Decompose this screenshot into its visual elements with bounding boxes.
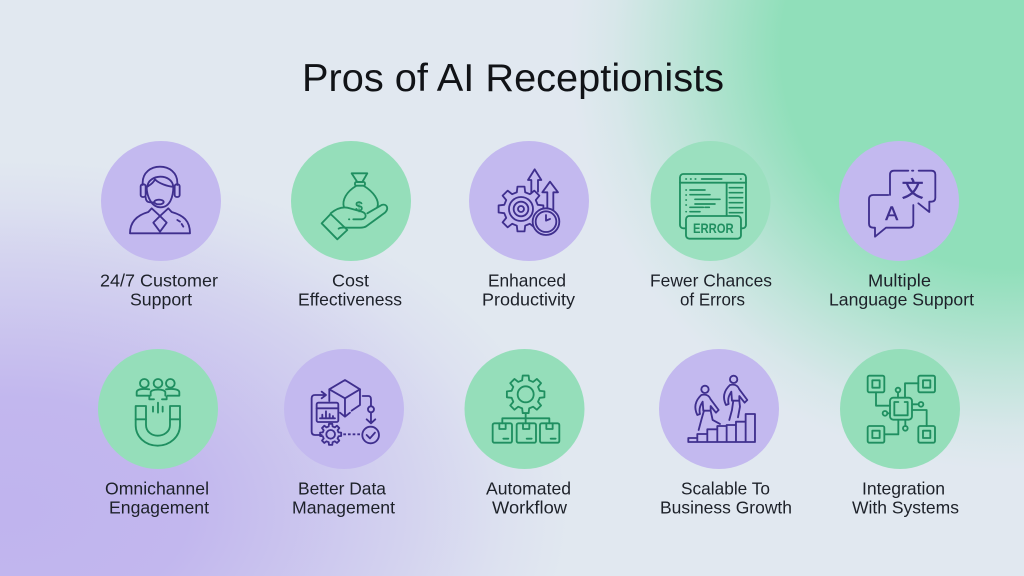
item: Omnichannel Engagement — [98, 349, 218, 518]
circle badge — [659, 349, 779, 469]
label: Automated — [486, 478, 571, 498]
label: Better Data — [298, 478, 386, 498]
label: Engagement — [109, 498, 209, 518]
label: Omnichannel — [105, 478, 209, 498]
item: Cost Effectiveness — [291, 141, 411, 310]
icon: translation speech bubbles: 文 — [902, 172, 924, 204]
icon: magnet attracting people — [136, 379, 180, 446]
item: Multiple Language Support — [829, 141, 974, 310]
label: Support — [130, 290, 192, 310]
icon: code window with error tag: ERROR — [693, 220, 734, 236]
label: of Errors — [680, 290, 745, 310]
icon: translation speech bubbles: A — [885, 204, 898, 225]
icon: code window with error tag — [680, 174, 746, 239]
icon: chip connected to four nodes — [868, 376, 935, 443]
item: Enhanced Productivity — [469, 141, 589, 310]
icon: people climbing stairs — [688, 376, 755, 442]
label: Integration — [862, 478, 945, 498]
label: Effectiveness — [298, 290, 402, 310]
label: 24/7 Customer — [100, 270, 218, 290]
icon: gear linked to three boxes — [493, 376, 559, 443]
title: Pros of AI Receptionists — [302, 57, 724, 100]
circle badge — [284, 349, 404, 469]
circle badge — [469, 141, 589, 261]
circle badge — [839, 141, 959, 261]
label: Enhanced — [488, 270, 566, 290]
icon: money bag on hand — [322, 173, 387, 239]
item: Better Data Management — [284, 349, 404, 518]
label: Management — [292, 498, 395, 518]
item: Automated Workflow — [464, 349, 584, 518]
item: 24/7 Customer Support — [100, 141, 221, 310]
circle badge — [98, 349, 218, 469]
label: Fewer Chances — [650, 270, 772, 290]
item: Scalable To Business Growth — [659, 349, 792, 518]
circle badge — [464, 349, 584, 469]
label: Business Growth — [660, 498, 792, 518]
circle badge — [840, 349, 960, 469]
label: With Systems — [852, 498, 959, 518]
label: Scalable To — [681, 478, 770, 498]
label: Productivity — [482, 290, 575, 310]
icon: translation speech bubbles — [869, 171, 935, 237]
icon: gear, clock and up arrows — [499, 169, 559, 235]
circle badge — [101, 141, 221, 261]
icon: support agent with headset — [130, 167, 190, 233]
label: Multiple — [868, 270, 931, 290]
label: Language Support — [829, 290, 974, 310]
label: Workflow — [492, 498, 567, 518]
icon: money bag on hand: $ — [355, 198, 363, 214]
circle badge — [291, 141, 411, 261]
circle badge — [650, 141, 770, 261]
item: Fewer Chances of Errors — [650, 141, 772, 310]
label: Cost — [332, 270, 369, 290]
item: Integration With Systems — [840, 349, 960, 518]
icon: data cube and process flow — [312, 380, 379, 445]
